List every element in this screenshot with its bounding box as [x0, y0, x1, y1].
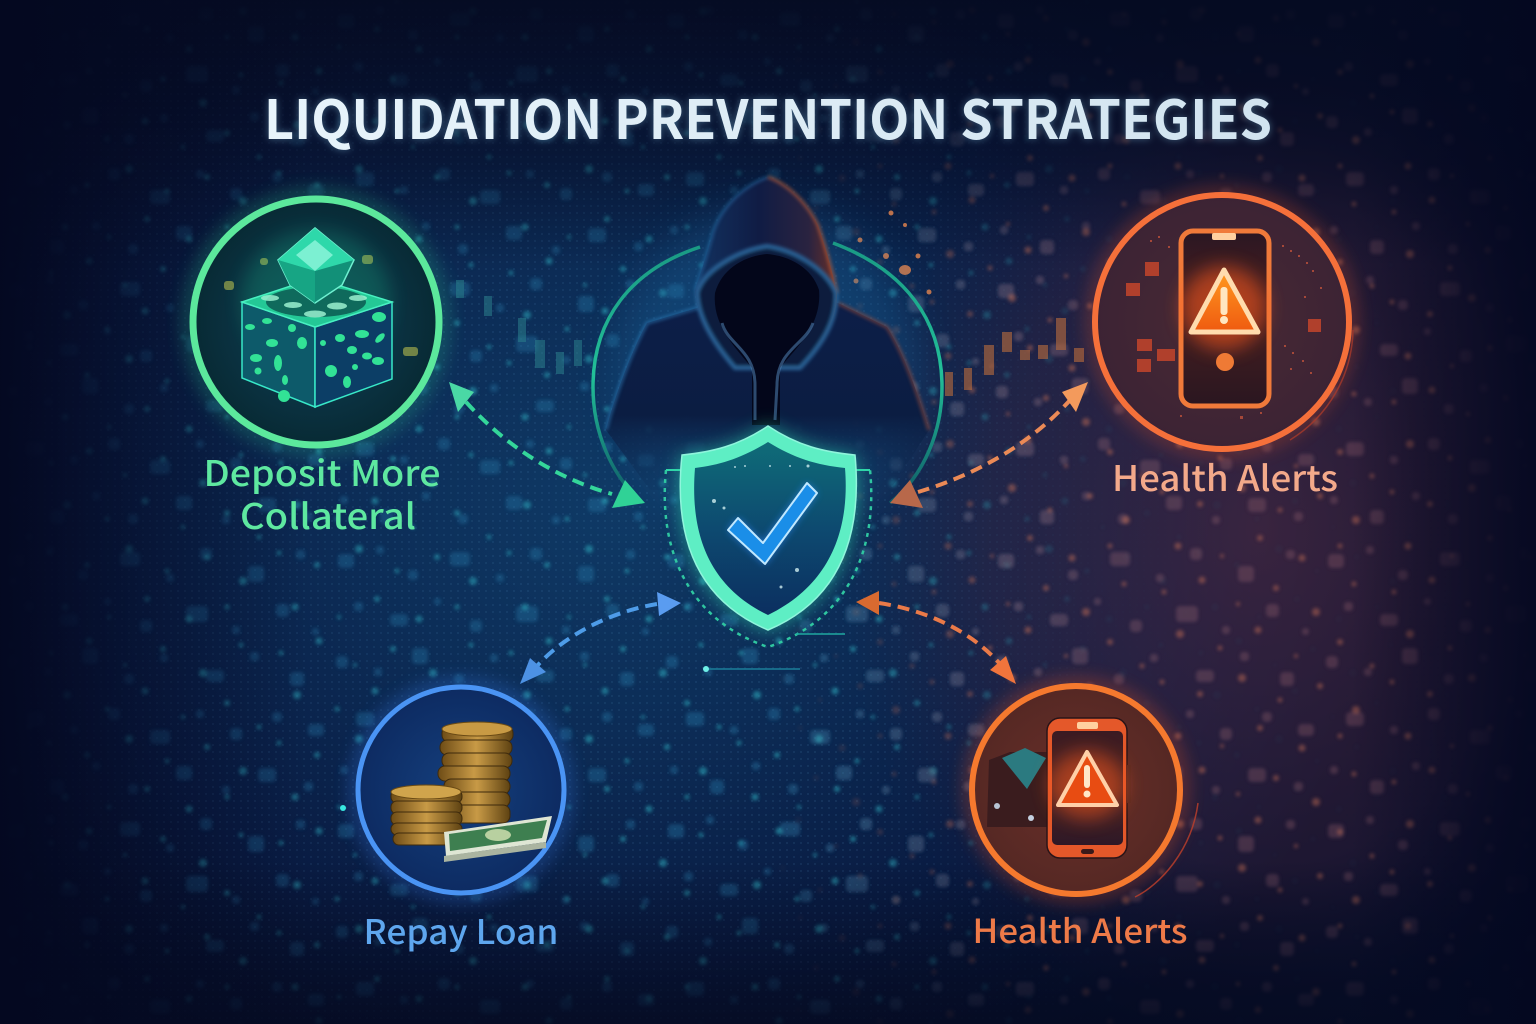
icon: check mark: [728, 483, 817, 564]
label: repay loan: Repay Loan: [364, 905, 558, 954]
shield: [665, 424, 871, 672]
candlesticks left: [456, 280, 582, 374]
label: deposit more collateral: Collateral: [240, 489, 416, 540]
arrow: deposit to shield: [449, 382, 645, 508]
icon ring: orange: [971, 685, 1181, 895]
panel: health alerts top: [1094, 194, 1353, 502]
label: health alerts: Health Alerts: [972, 905, 1188, 953]
icon ring: blue: [357, 686, 565, 894]
label: health alerts: Health Alerts: [1112, 451, 1338, 502]
icon ring: green: [190, 196, 442, 448]
arrow: alerts to shield: [890, 382, 1088, 508]
icon: collateral cube: [241, 228, 392, 407]
title: LIQUIDATION PREVENTION STRATEGIES: [264, 76, 1272, 155]
icon: phone with warning: [1181, 231, 1269, 406]
face opening: [715, 254, 819, 425]
hoodie strings: [722, 323, 813, 420]
panel: deposit more collateral: [190, 196, 442, 540]
arrow: shield to alerts: [856, 591, 1016, 684]
panel: repay loan: [340, 686, 565, 954]
panel: health alerts bottom: [971, 685, 1198, 953]
arrow: shield to repay: [520, 592, 681, 684]
label: deposit more collateral: [204, 446, 440, 540]
label: deposit more collateral: Deposit More: [204, 446, 440, 497]
candlesticks right: [945, 318, 1084, 396]
icon: phone with warning: [1047, 718, 1131, 858]
icon: coins and cash: [391, 722, 552, 862]
hooded figure: [593, 177, 942, 530]
icon: wallet with shield: [987, 748, 1050, 827]
title: LIQUIDATION PREVENTION STRATEGIES: [264, 76, 1272, 155]
icon ring: orange: [1094, 194, 1350, 450]
